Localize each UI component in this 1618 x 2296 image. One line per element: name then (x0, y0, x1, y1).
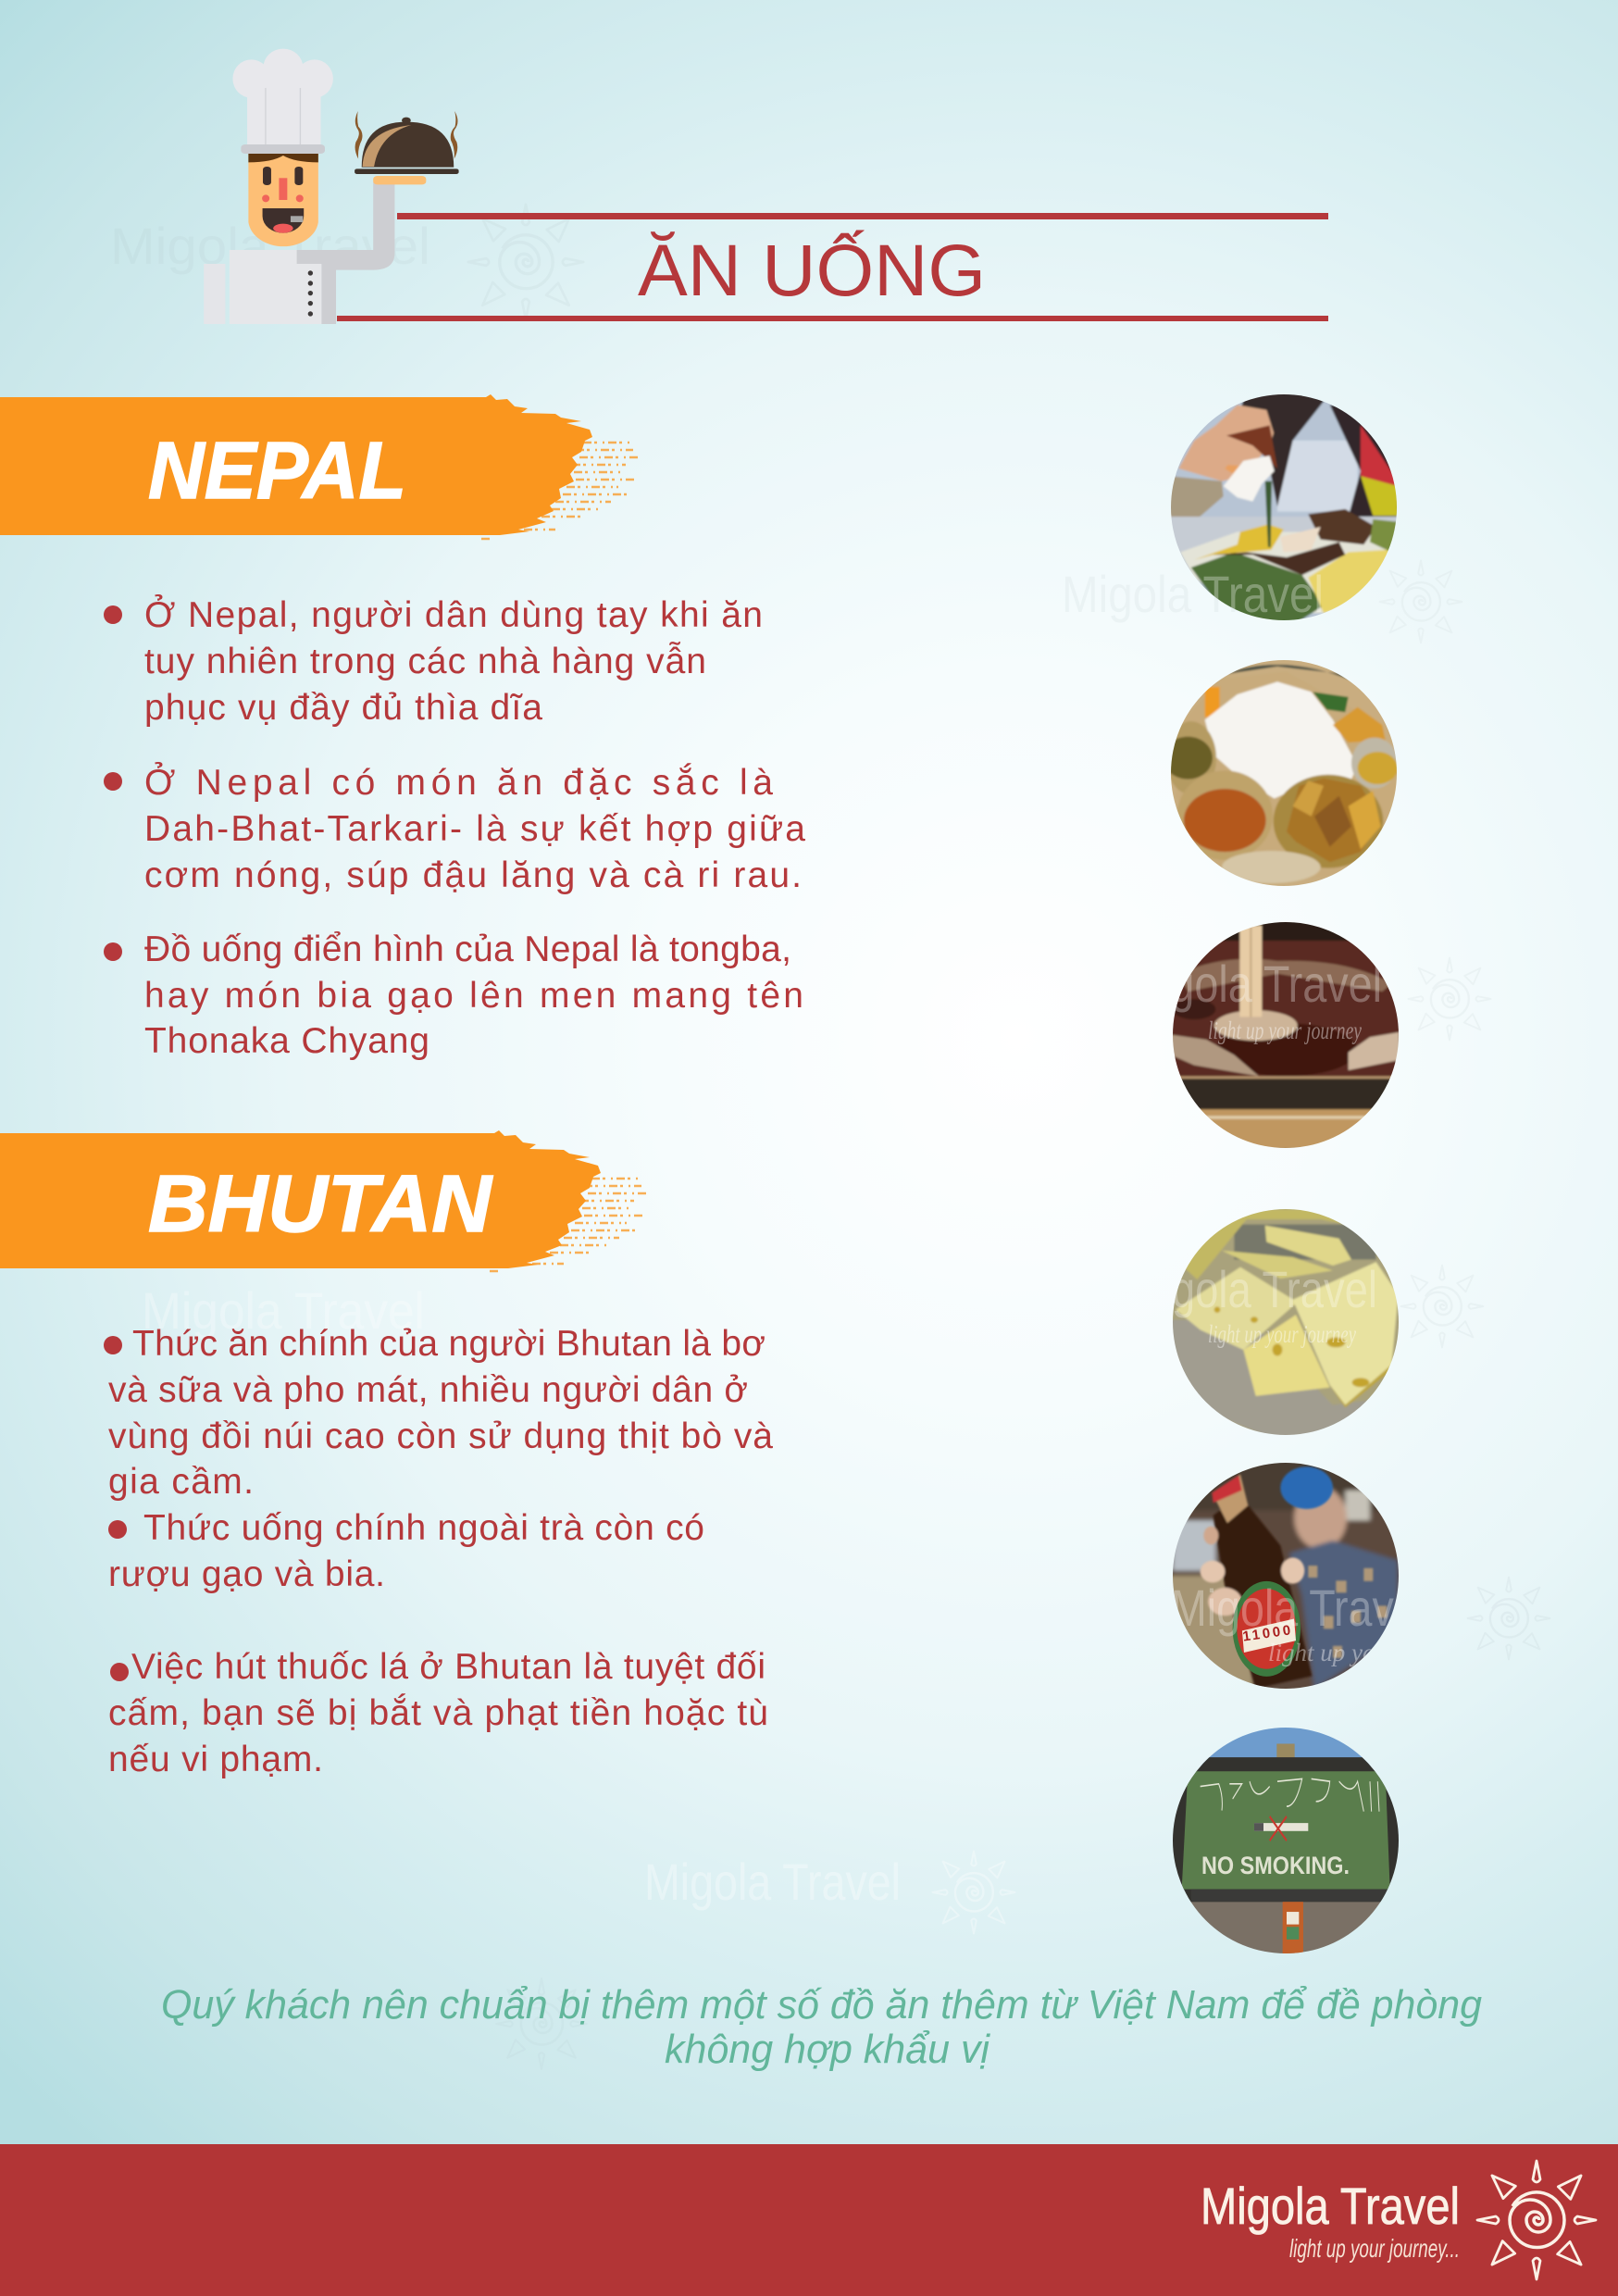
text block: Nepal bullets (104, 594, 805, 1061)
text block: Bhutan bullets: cấm, bạn sẽ bị bắt và phạt tiền hoặc tù (108, 1693, 768, 1733)
callout: closing note: Quý khách nên chuẩn bị thêm một số đồ ăn thêm từ Việt Nam để đề phòng (161, 1982, 1483, 2028)
text block: Bhutan bullets: gia cầm. (108, 1462, 254, 1502)
photo: eating by hand (1171, 394, 1397, 620)
panel: Nepal banner (0, 394, 639, 539)
brush stroke shape (0, 394, 592, 535)
photo: cheese slices: light up your journey (1208, 1320, 1356, 1348)
text block: Nepal bullets: Dah-Bhat-Tarkari- là sự kết hợp giữa (144, 809, 805, 849)
panel: Bhutan banner (0, 1130, 647, 1271)
text block: Nepal bullets: cơm nóng, súp đậu lăng và cà ri rau. (144, 855, 802, 895)
text block: Bhutan bullets: rượu gạo và bia. (108, 1554, 385, 1594)
photo: cheese slices (1173, 1209, 1399, 1435)
photo: man holding beer bottle (1173, 1463, 1399, 1689)
label number: 11000 (1241, 1623, 1291, 1645)
photo: tongba drink (1173, 922, 1399, 1148)
heading: NEPAL (148, 426, 406, 516)
text block: Nepal bullets: Đồ uống điển hình của Nepal là tongba, (144, 930, 791, 969)
callout: closing note: không hợp khẩu vị (665, 2027, 990, 2072)
chef hat (232, 49, 333, 154)
watermarks on background: Migola Travel (142, 1281, 425, 1340)
cloche and tray (355, 111, 459, 184)
watermarks on background (110, 205, 1550, 2069)
photo: man holding beer bottle: light up your (1268, 1639, 1398, 1666)
watermarks on background: Migola Travel (110, 217, 430, 275)
photo: no smoking sign (1173, 1728, 1399, 1953)
footer band (0, 2144, 1618, 2296)
callout: closing note (161, 1982, 1483, 2072)
chef jacket (204, 182, 394, 324)
bottle label (1233, 1581, 1301, 1677)
text block: Bhutan bullets (104, 1324, 773, 1779)
text block: Bhutan bullets: Việc hút thuốc lá ở Bhutan là tuyệt đối (131, 1647, 765, 1687)
brush splatter (481, 443, 639, 539)
tagline: light up your journey... (1289, 2234, 1460, 2263)
chef face (248, 154, 318, 246)
text block: Nepal bullets: Ở Nepal, người dân dùng tay khi ăn (144, 594, 763, 635)
text block: Bhutan bullets: vùng đồi núi cao còn sử dụng thịt bò và (108, 1416, 773, 1456)
watermark: Migola Travel (1171, 1578, 1427, 1637)
text block: Bhutan bullets: Thức uống chính ngoài trà còn có (143, 1508, 704, 1548)
text block: Bhutan bullets: Thức ăn chính của người Bhutan là bơ (132, 1324, 765, 1364)
title: ĂN UỐNG (638, 229, 986, 311)
icon: chef holding cloche (204, 49, 459, 324)
watermark: Migola Travel (1062, 565, 1324, 623)
photo: Dal Bhat Tarkari plate (1171, 660, 1397, 886)
text block: Nepal bullets: Ở Nepal có món ăn đặc sắc là (144, 762, 773, 803)
brush splatter (490, 1179, 647, 1271)
text block: Bhutan bullets: và sữa và pho mát, nhiều người dân ở (108, 1370, 748, 1410)
title rules (337, 213, 1328, 321)
watermarks on background: Migola Travel (644, 1853, 901, 1911)
watermarks on background: Migola Travel (1062, 565, 1324, 623)
text block: Bhutan bullets: nếu vi phạm. (108, 1740, 323, 1779)
text block: Nepal bullets: phục vụ đầy đủ thìa dĩa (144, 688, 542, 728)
watermark: Migola Travel (1125, 955, 1382, 1013)
icon: sun logo (1477, 2161, 1596, 2279)
text block: Nepal bullets: tuy nhiên trong các nhà hàng vẫn (144, 642, 706, 681)
plaid shirt (1308, 1566, 1387, 1658)
brush stroke shape (0, 1130, 601, 1268)
text block: Nepal bullets: Thonaka Chyang (144, 1021, 429, 1061)
photo: tongba drink: light up your journey (1208, 1017, 1362, 1044)
sign caption: NO SMOKING. (1201, 1852, 1350, 1879)
heading: BHUTAN (148, 1159, 493, 1249)
text block: Nepal bullets: hay món bia gạo lên men mang tên (144, 976, 803, 1016)
watermark: Migola Travel (1127, 1260, 1377, 1318)
brand name: Migola Travel (1201, 2177, 1460, 2235)
